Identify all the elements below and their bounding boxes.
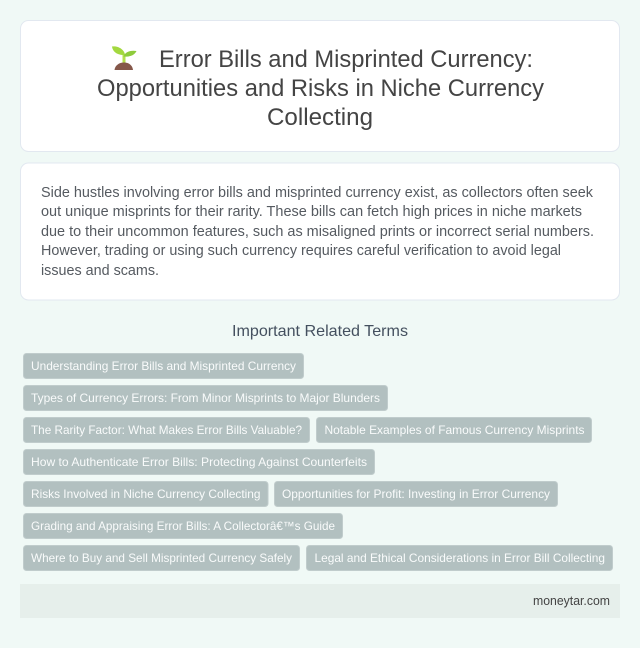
chip: risks bbox=[24, 482, 268, 506]
title: Collecting bbox=[267, 104, 373, 131]
chip: understanding bbox=[24, 354, 304, 378]
heading: related terms: Important Related Terms bbox=[232, 323, 408, 340]
chip: types bbox=[24, 386, 388, 410]
chip: rarity: The Rarity Factor: What Makes Error Bills Valuable? bbox=[31, 423, 302, 437]
chip: risks: Risks Involved in Niche Currency Collecting bbox=[31, 487, 260, 501]
footer: source: moneytar.com bbox=[533, 594, 610, 608]
text block: description: Side hustles involving error bills and misprinted currency exist, as collectors often seek bbox=[41, 185, 594, 201]
chip: understanding: Understanding Error Bills and Misprinted Currency bbox=[31, 359, 296, 373]
chip: notable examples bbox=[316, 418, 592, 442]
chip: buy and sell bbox=[24, 546, 300, 570]
panel: related term chips bbox=[24, 354, 612, 570]
chip: opportunities bbox=[274, 482, 558, 506]
title: Opportunities and Risks in Niche Currency bbox=[97, 75, 544, 102]
text block: description: issues and scams. bbox=[41, 263, 159, 279]
chip: opportunities: Opportunities for Profit: Investing in Error Currency bbox=[282, 487, 550, 501]
title: Error Bills and Misprinted Currency: bbox=[159, 46, 533, 73]
chip: buy and sell: Where to Buy and Sell Misprinted Currency Safely bbox=[31, 551, 292, 565]
chip: authenticate: How to Authenticate Error Bills: Protecting Against Counterfeits bbox=[31, 455, 367, 469]
footer bbox=[20, 584, 620, 618]
text block: description: due to their uncommon features, such as misaligned prints or incorrect serial numbers. bbox=[41, 224, 594, 240]
chip: legal bbox=[306, 546, 612, 570]
chip: notable examples: Notable Examples of Famous Currency Misprints bbox=[324, 423, 584, 437]
text block: description: However, trading or using such currency requires careful verification to avoid legal bbox=[41, 243, 561, 259]
chip: rarity bbox=[24, 418, 310, 442]
panel: description bbox=[20, 163, 620, 300]
text block: description: out unique misprints for their rarity. These bills can fetch high prices in niche markets bbox=[41, 204, 582, 220]
title bbox=[97, 46, 544, 131]
chip: legal: Legal and Ethical Considerations in Error Bill Collecting bbox=[314, 551, 605, 565]
chip: types: Types of Currency Errors: From Minor Misprints to Major Blunders bbox=[31, 391, 380, 405]
panel: title card bbox=[20, 20, 620, 152]
text block: description bbox=[41, 185, 594, 279]
chip: authenticate bbox=[24, 450, 374, 474]
icon: seedling bbox=[112, 46, 136, 70]
chip: grading bbox=[24, 514, 342, 538]
chip: grading: Grading and Appraising Error Bills: A Collectorâ€™s Guide bbox=[31, 519, 335, 533]
